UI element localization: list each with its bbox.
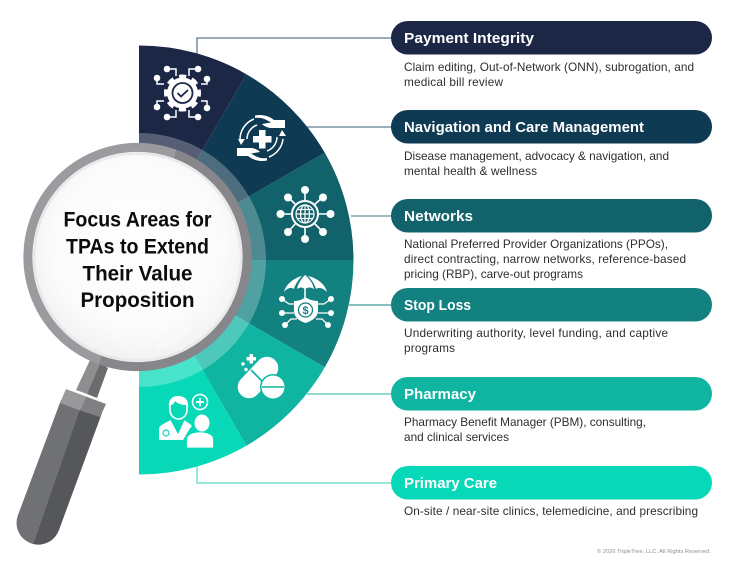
panel: stop loss: Stop Loss (404, 297, 471, 314)
panel: primary care (391, 466, 712, 518)
icon: global network (276, 186, 334, 243)
panel: payment integrity (391, 21, 712, 89)
panel: networks: National Preferred Provider Organizations (PPOs), (404, 237, 668, 251)
copyright note: © 2026 TripleTree, LLC. All Rights Reserved. (597, 548, 711, 555)
icon: hands around a medical cross (237, 115, 286, 161)
fan of six wedges (139, 46, 354, 474)
panel: networks: pricing (RBP), carve-out programs (404, 267, 583, 281)
panel: stop loss: Underwriting authority, level funding, and captive (404, 326, 668, 340)
title: Focus Areas for (64, 208, 212, 232)
panel: payment integrity: medical bill review (404, 75, 503, 89)
panel: payment integrity: Claim editing, Out-of-Network (ONN), subrogation, and (404, 60, 694, 74)
panel: stop loss: programs (404, 341, 455, 355)
panel: primary care: On-site / near-site clinics, telemedicine, and prescribing (404, 504, 698, 518)
panel: networks (391, 199, 712, 281)
magnifying glass (17, 147, 247, 545)
panel: pharmacy (391, 377, 712, 444)
panel: networks: Networks (404, 208, 473, 225)
panel: stop loss (391, 288, 712, 355)
panel: navigation and care management: Navigation and Care Management (404, 119, 644, 136)
panel: pharmacy: and clinical services (404, 430, 509, 444)
icon: gear with circuit nodes (154, 66, 210, 120)
panel: pharmacy: Pharmacy Benefit Manager (PBM), consulting, (404, 415, 646, 429)
panel: navigation and care management (391, 110, 712, 178)
icon: pills (241, 354, 286, 400)
title: TPAs to Extend (66, 236, 209, 258)
title (64, 208, 212, 312)
panel: payment integrity: Payment Integrity (404, 30, 535, 47)
connector lines (197, 38, 392, 483)
panel: networks: direct contracting, narrow networks, reference-based (404, 252, 686, 266)
panel: primary care: Primary Care (404, 475, 497, 492)
icon: umbrella over shield with dollar (279, 275, 334, 328)
title: Proposition (80, 289, 194, 312)
icon: umbrella over shield with dollar: $ (302, 305, 309, 317)
panel: pharmacy: Pharmacy (404, 386, 477, 403)
panel: navigation and care management: mental health & wellness (404, 164, 537, 178)
title: Their Value (82, 262, 192, 286)
icon: doctor and patient (159, 394, 214, 448)
panel: navigation and care management: Disease management, advocacy & navigation, and (404, 149, 669, 163)
